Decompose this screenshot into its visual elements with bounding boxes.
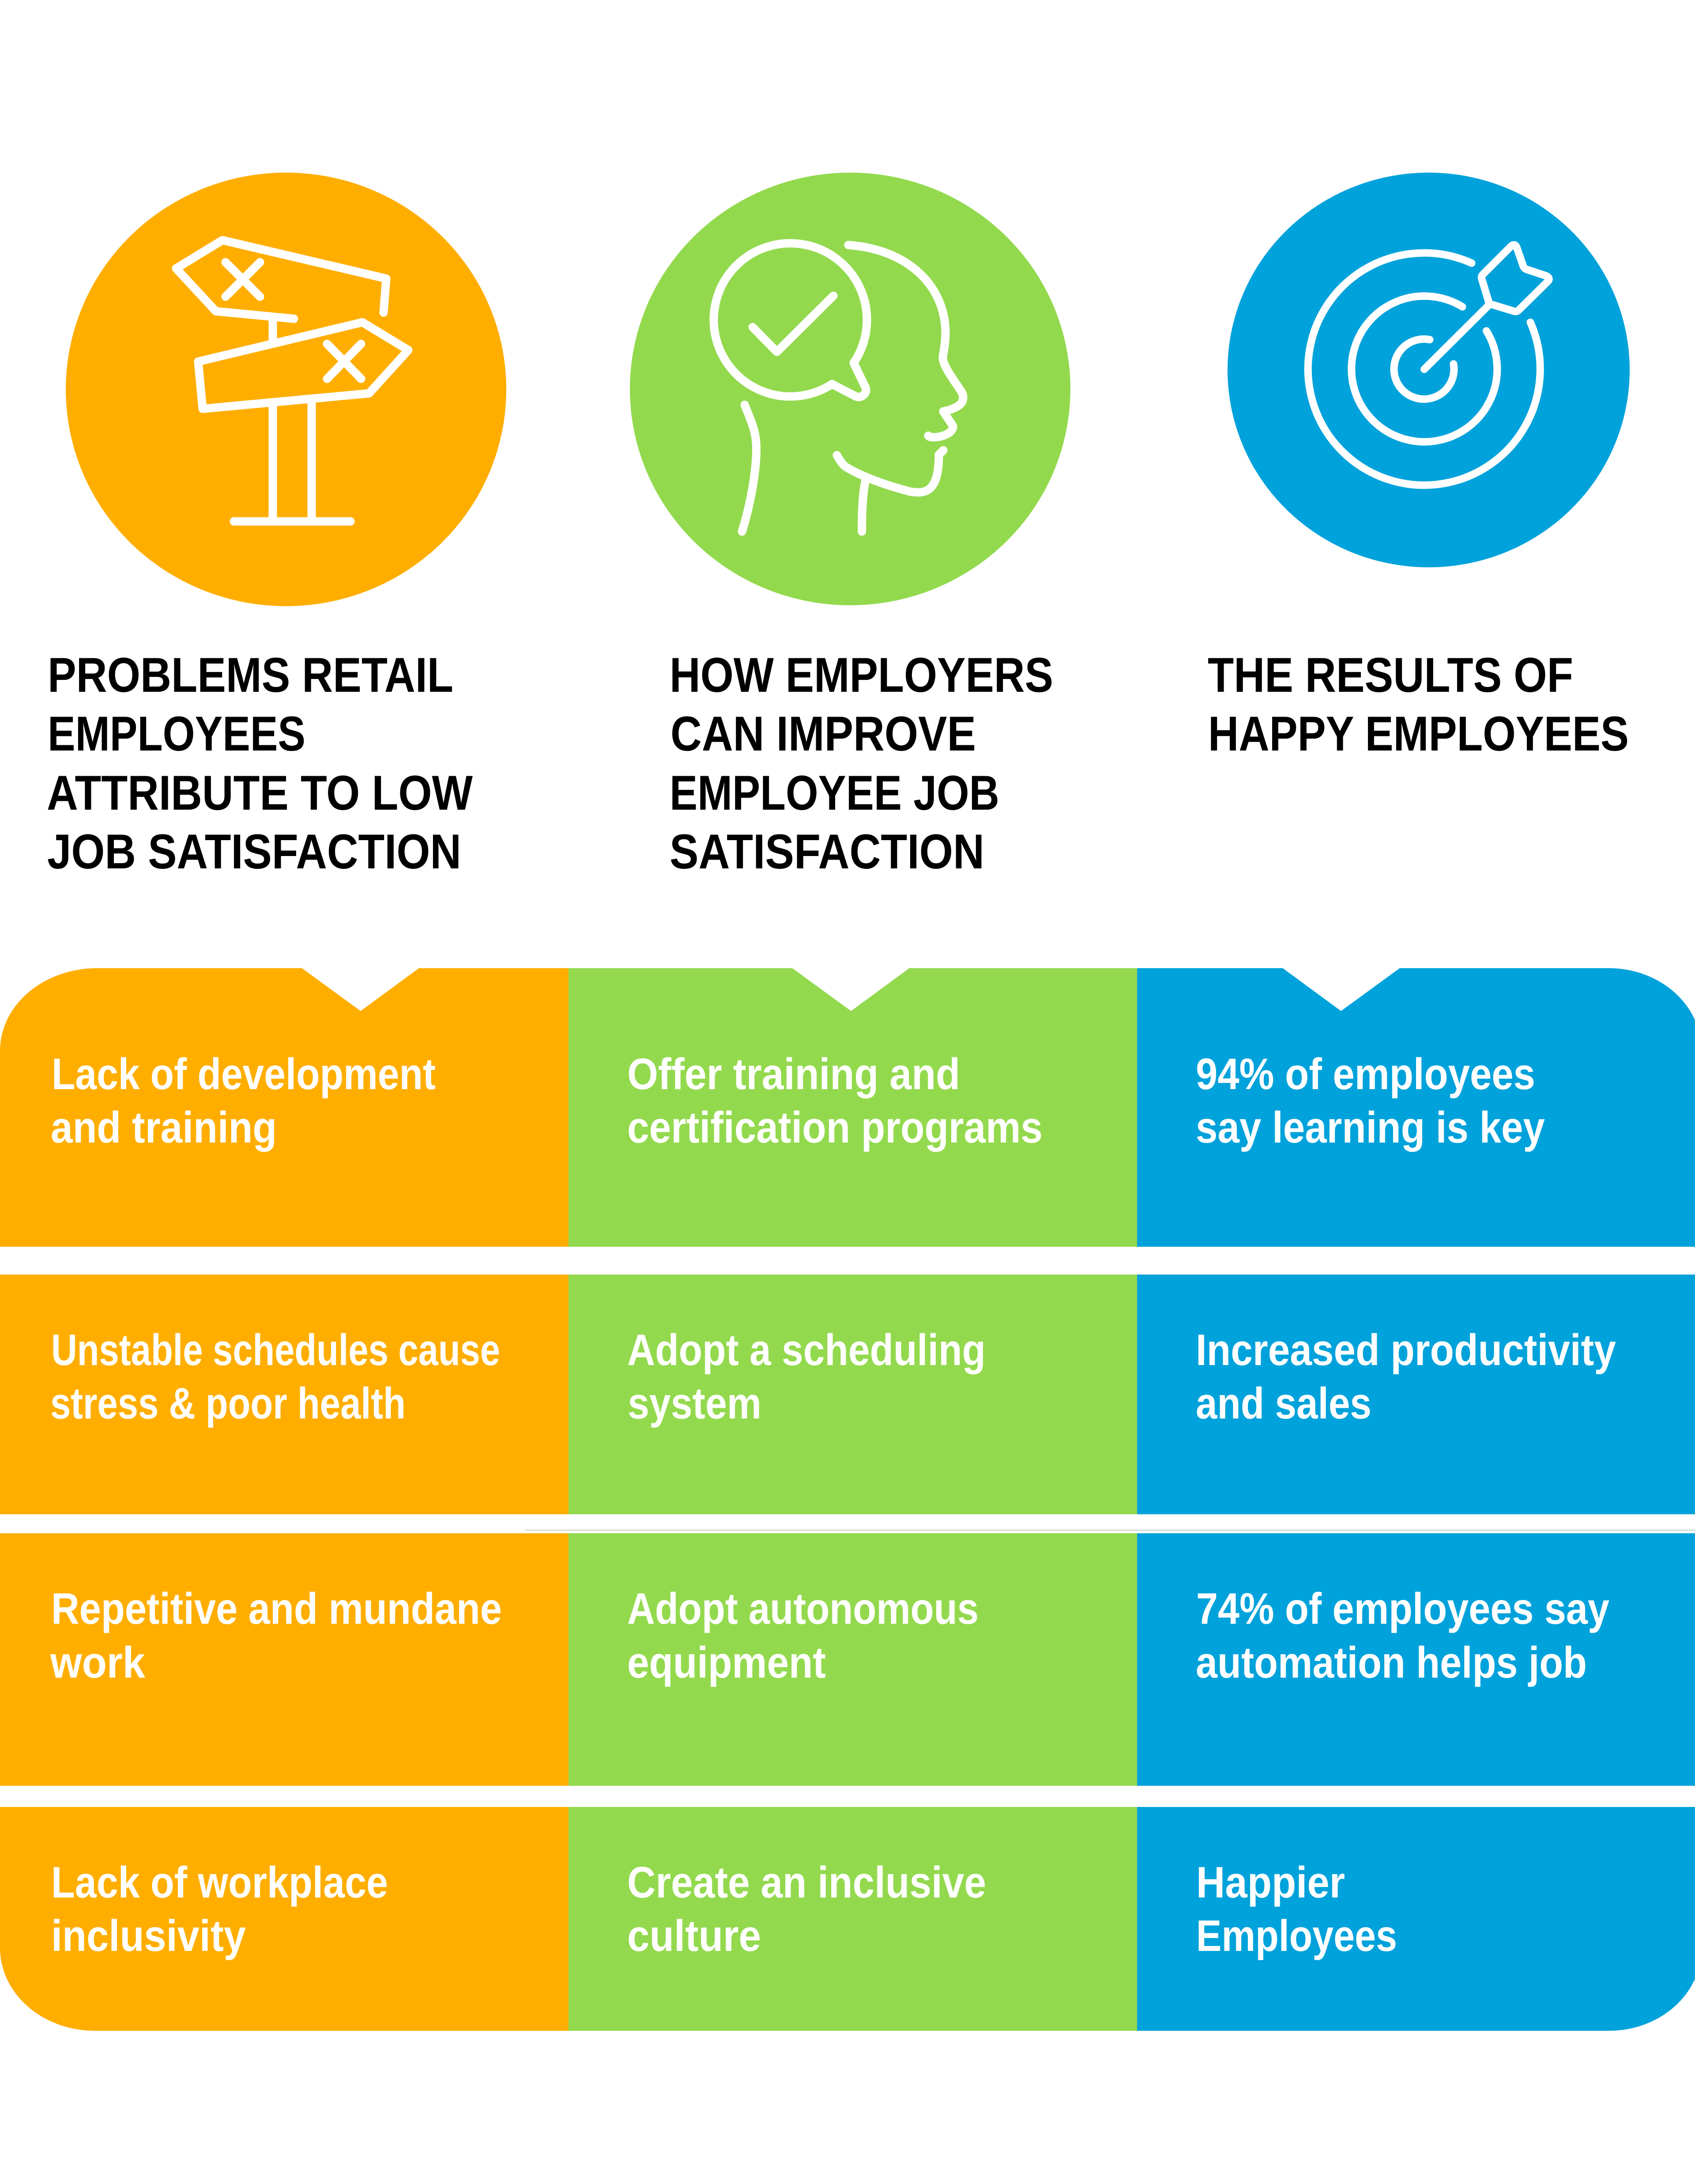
heading: employers: CAN IMPROVE — [670, 706, 976, 761]
text: productivity: Increased productivity — [1196, 1325, 1616, 1375]
text: unstable schedules — [50, 1325, 500, 1428]
panel: row 4 — [0, 1807, 1695, 2031]
cell: orange bottom — [0, 1807, 569, 2031]
heading: problems: EMPLOYEES — [48, 706, 305, 761]
text: productivity — [1196, 1325, 1616, 1428]
text: scheduling system: system — [628, 1379, 761, 1428]
panel: row 2 — [0, 1275, 1695, 1514]
text: 74 percent — [1196, 1584, 1609, 1687]
heading: employers: EMPLOYEE JOB — [670, 766, 999, 820]
text: inclusive culture — [627, 1858, 986, 1961]
text: scheduling system — [627, 1325, 986, 1428]
text: inclusive culture: culture — [627, 1911, 761, 1961]
text: offer training: Offer training and — [627, 1049, 960, 1099]
heading: employers — [670, 648, 1053, 879]
cell: orange top with notch — [0, 968, 569, 1247]
text: workplace inclusivity: Lack of workplace — [51, 1858, 388, 1907]
text: lack of development: Lack of development — [52, 1049, 436, 1099]
heading: results: HAPPY EMPLOYEES — [1208, 706, 1629, 761]
text: lack of development — [51, 1049, 436, 1152]
text: repetitive work: Repetitive and mundane — [51, 1584, 502, 1633]
text: workplace inclusivity: inclusivity — [51, 1911, 246, 1961]
heading: employers: HOW EMPLOYERS — [670, 648, 1053, 702]
text: happier employees: Happier — [1196, 1858, 1345, 1907]
text: offer training — [627, 1049, 1043, 1152]
text: offer training: certification programs — [627, 1103, 1043, 1152]
heading: results — [1208, 648, 1629, 761]
text: inclusive culture: Create an inclusive — [627, 1858, 986, 1907]
text: 74 percent: automation helps job — [1196, 1638, 1587, 1687]
text: autonomous equipment — [627, 1584, 979, 1687]
text: autonomous equipment: equipment — [627, 1638, 826, 1687]
text: happier employees: Employees — [1196, 1911, 1397, 1961]
text: unstable schedules: stress & poor health — [50, 1379, 406, 1428]
cell: blue bottom — [1137, 1807, 1695, 2031]
heading: problems: ATTRIBUTE TO LOW — [47, 766, 473, 820]
text: workplace inclusivity — [51, 1858, 388, 1961]
text: 74 percent: 74% of employees say — [1196, 1584, 1609, 1633]
panel: row 3 — [0, 1533, 1695, 1786]
text: repetitive work: work — [50, 1638, 145, 1687]
panel: row 1 — [0, 968, 1695, 1247]
text: unstable schedules: Unstable schedules cause — [51, 1325, 500, 1375]
cell: green bottom — [569, 1807, 1137, 2031]
text: happier employees — [1196, 1858, 1397, 1961]
heading: employers: SATISFACTION — [670, 824, 984, 879]
text: 94 percent — [1196, 1049, 1545, 1152]
heading: problems: JOB SATISFACTION — [47, 824, 461, 879]
heading: problems — [47, 648, 473, 879]
cell: blue top with notch — [1137, 968, 1695, 1247]
heading: problems: PROBLEMS RETAIL — [48, 648, 453, 702]
text: lack of development: and training — [51, 1103, 277, 1152]
heading: results: THE RESULTS OF — [1208, 648, 1573, 702]
cell: green top with notch — [569, 968, 1137, 1247]
text: 94 percent: 94% of employees — [1196, 1049, 1535, 1099]
text: autonomous equipment: Adopt autonomous — [627, 1584, 979, 1633]
text: scheduling system: Adopt a scheduling — [627, 1325, 986, 1375]
icon: head with checkmark speech bubble in green circle — [630, 173, 1070, 605]
icon: signpost in orange circle — [66, 173, 506, 606]
text: repetitive work — [50, 1584, 502, 1687]
text: 94 percent: say learning is key — [1196, 1103, 1545, 1152]
icon: target with arrow in blue circle — [1228, 173, 1630, 567]
text: productivity: and sales — [1196, 1379, 1371, 1428]
